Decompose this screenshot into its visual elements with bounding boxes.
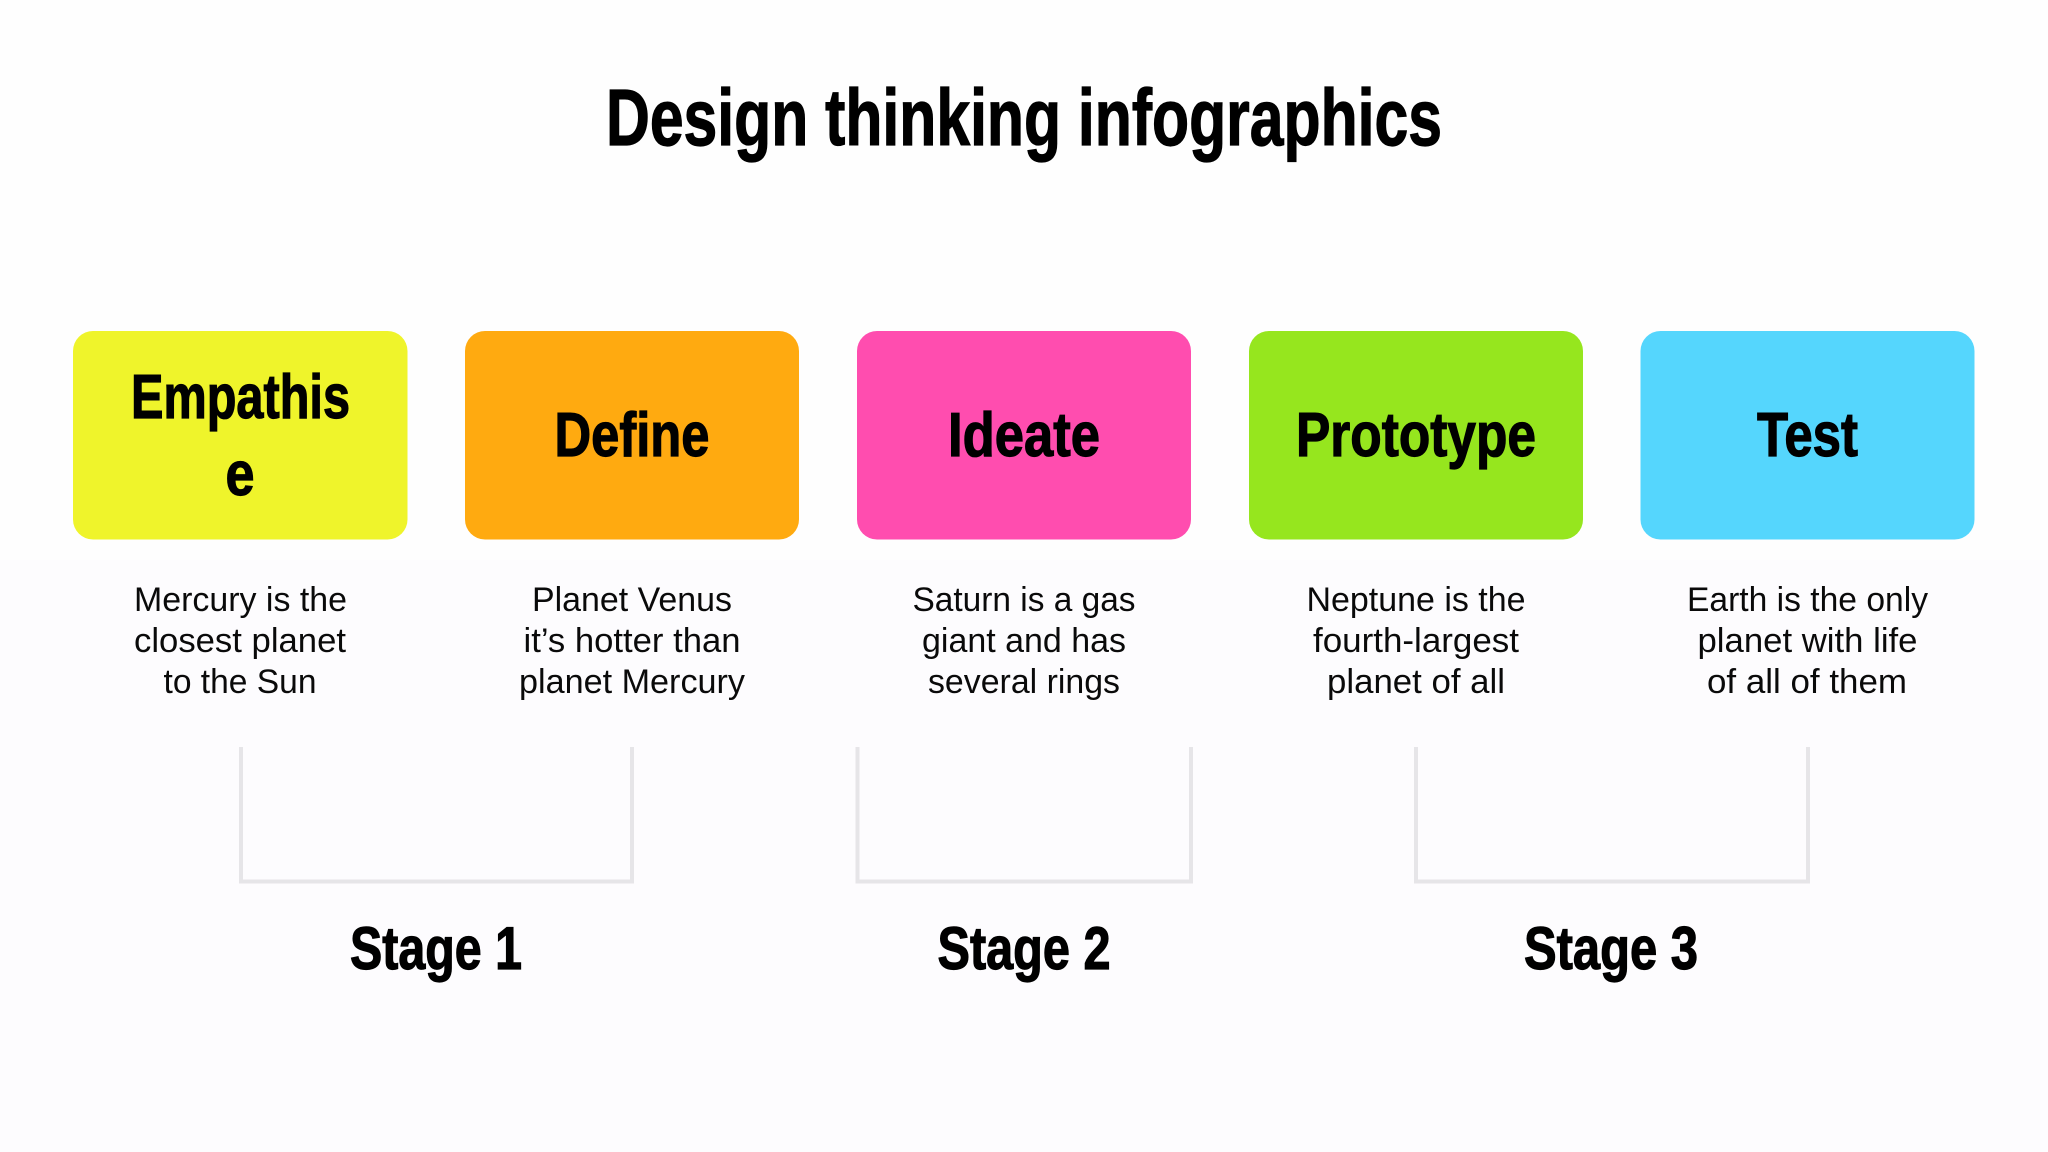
description: Test: of all of them: [1707, 663, 1907, 701]
description: Empathise: [134, 581, 347, 701]
description: Prototype: [1306, 581, 1526, 701]
description: Test: [1687, 581, 1928, 701]
card label: Define: Define: [554, 401, 710, 470]
description: Ideate: [912, 581, 1136, 701]
panel: Define: [465, 331, 799, 701]
stage label: Stage 3: Stage 3: [1524, 915, 1698, 982]
description: Empathise: to the Sun: [164, 663, 316, 701]
card: Test: [1640, 331, 1974, 540]
panel: Test: [1640, 331, 1974, 701]
description: Ideate: Saturn is a gas: [912, 581, 1136, 619]
card label: Prototype: Prototype: [1296, 401, 1536, 470]
bracket: Stage 2: [858, 747, 1191, 882]
stage label: Stage 2: Stage 2: [938, 915, 1110, 982]
description: Define: planet Mercury: [519, 663, 745, 701]
description: Prototype: Neptune is the: [1306, 581, 1526, 619]
description: Prototype: planet of all: [1327, 663, 1505, 701]
card: Ideate: [857, 331, 1191, 540]
card: Empathise: [73, 331, 408, 540]
title: Design thinking infographics: [606, 73, 1442, 162]
card label: Empathise: e: [226, 440, 254, 509]
description: Empathise: Mercury is the: [134, 581, 347, 619]
description: Test: Earth is the only: [1687, 581, 1928, 619]
stage label: Stage 1: Stage 1: [350, 915, 522, 982]
card: Prototype: [1249, 331, 1583, 540]
description: Define: [519, 581, 745, 701]
bracket: Stage 1: [241, 747, 632, 882]
card label: Ideate: Ideate: [948, 401, 1100, 470]
card label: Test: Test: [1757, 401, 1858, 470]
description: Define: it’s hotter than: [524, 622, 740, 660]
card label: Empathise: [131, 363, 350, 509]
description: Ideate: several rings: [928, 663, 1120, 701]
panel: Empathise: [73, 331, 408, 701]
bracket: Stage 3: [1416, 747, 1808, 882]
description: Empathise: closest planet: [134, 622, 347, 660]
panel: Ideate: [857, 331, 1191, 701]
description: Ideate: giant and has: [922, 622, 1126, 660]
description: Prototype: fourth-largest: [1313, 622, 1520, 660]
card label: Empathise: Empathis: [131, 363, 350, 432]
panel: Prototype: [1249, 331, 1583, 701]
card: Define: [465, 331, 799, 540]
description: Define: Planet Venus: [532, 581, 732, 619]
description: Test: planet with life: [1698, 622, 1918, 660]
